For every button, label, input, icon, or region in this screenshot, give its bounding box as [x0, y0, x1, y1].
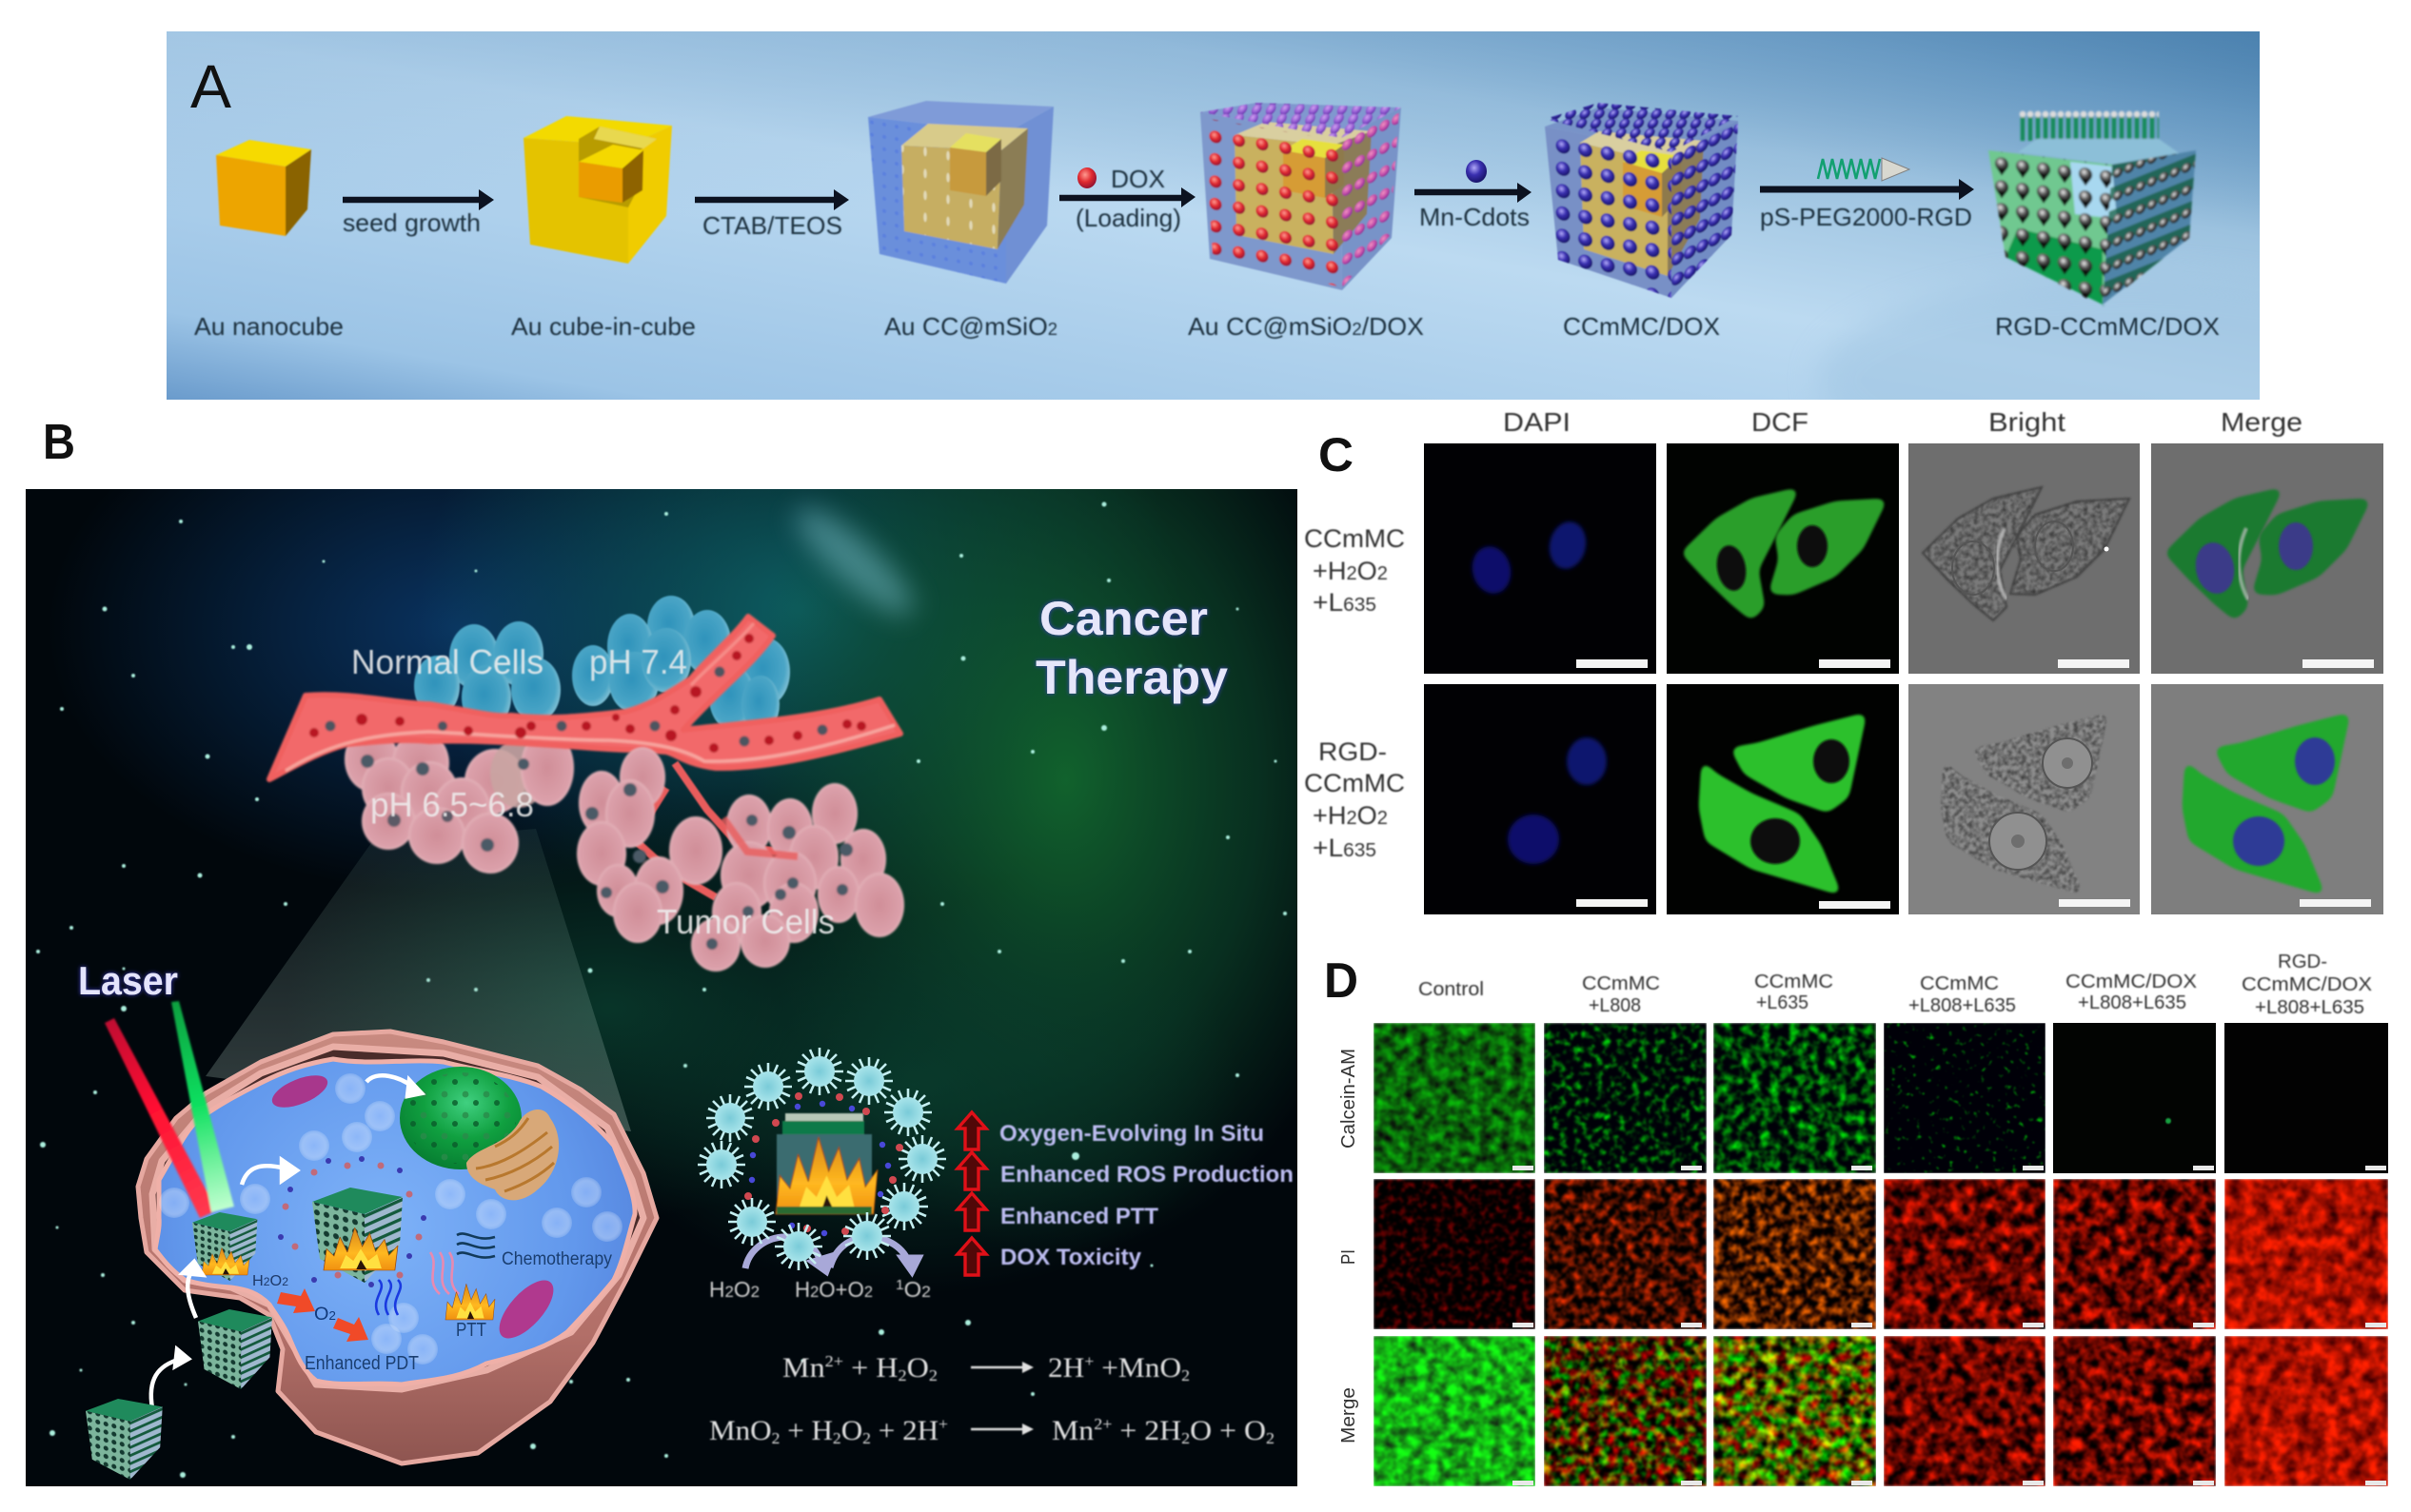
column headers: DAPI [1503, 407, 1571, 437]
equation 1: Mn [782, 1352, 822, 1384]
column headers: Merge [2221, 407, 2302, 437]
image grid: Calcein-AM row [1373, 1023, 2388, 1173]
arrow: seed growth [343, 189, 494, 210]
label: Mn-Cdots: Mn-Cdots [1419, 203, 1530, 231]
equation 2: MnO [709, 1415, 769, 1446]
column header: CCmMC/DOX +L808+L635: +L808+L635 [2078, 992, 2186, 1013]
label: DOX with red ball: DOX [1111, 165, 1165, 193]
list: therapeutic enhancements [958, 1112, 1294, 1275]
equation 1: 2 [929, 1366, 938, 1384]
label: H2O2: H2O2 [709, 1277, 760, 1302]
image: DAPI row 2 [1424, 684, 1656, 914]
equation 2: Mn [1052, 1415, 1092, 1446]
image: Bright row 1 [1908, 443, 2140, 674]
row label 2: +L635 [1313, 834, 1376, 862]
panel A: synthesis scheme [167, 31, 2260, 400]
label: Mn-Cdots drop icon [1466, 160, 1487, 183]
label: Au CC@mSiO2: Au CC@mSiO2 [884, 312, 1057, 341]
golgi [466, 1109, 559, 1200]
normal cells cluster [414, 596, 790, 733]
title: Cancer Therapy [1036, 592, 1228, 704]
label: 1O2: 2 [921, 1283, 931, 1301]
label: pS-PEG2000-RGD: pS-PEG2000-RGD [1760, 203, 1972, 231]
equation 1: + [1084, 1352, 1094, 1370]
title: Cancer Therapy: Cancer [1039, 592, 1208, 645]
central nanoparticle with flame and dots [278, 1156, 426, 1287]
icon: Au CC@mSiO2/DOX [1200, 103, 1401, 290]
reactive oxygen stars [698, 1048, 946, 1230]
nanoparticle with ROS schematic [698, 1048, 946, 1302]
flame: PTT [445, 1284, 495, 1320]
cell body [138, 1031, 657, 1463]
label: H2O2: H2O2 [252, 1273, 288, 1289]
equation 2: 2 [862, 1429, 871, 1447]
column header: RGD-CCmMC/DOX +L808+L635: CCmMC/DOX [2242, 974, 2372, 995]
column header: CCmMC +L808: +L808 [1589, 995, 1641, 1016]
panel B: cancer therapy illustration [26, 489, 1297, 1486]
label: Chemotherapy: Chemotherapy [502, 1249, 612, 1269]
mitochondrion top [267, 1069, 332, 1114]
panel letter A: A [190, 52, 231, 121]
blood vessel [269, 617, 900, 779]
equation 2: 2 [772, 1429, 780, 1447]
label: Tumor Cells: Tumor Cells [657, 902, 835, 941]
row label 1: +H2O2 [1313, 557, 1388, 585]
arrow: Mn-Cdots [1414, 183, 1532, 203]
arrow: pS-PEG2000-RGD [1760, 179, 1974, 200]
column header: CCmMC +L808+L635 [1908, 973, 2016, 1016]
mitochondrion lower [490, 1271, 563, 1347]
label: Laser: Laser [78, 958, 178, 1003]
panel letter D: D [1324, 953, 1358, 1009]
notch nanoparticle [198, 1309, 272, 1389]
equation 2 [709, 1415, 1275, 1447]
row label 1: +L635 [1313, 588, 1376, 617]
label: CCmMC/DOX: CCmMC/DOX [1563, 312, 1720, 341]
column header: CCmMC +L635: +L635 [1756, 992, 1808, 1013]
equation 1: 2 [1181, 1366, 1190, 1384]
O2 bubbles [159, 1073, 623, 1365]
nucleus [400, 1067, 522, 1169]
arrow: DOX loading [1059, 187, 1196, 207]
cytoplasm [155, 1059, 635, 1384]
light cone from tumour to cell [206, 829, 631, 1131]
equation 2: 2 [833, 1429, 841, 1447]
equation 2: 2+ [1094, 1415, 1112, 1433]
column header: CCmMC +L635: CCmMC [1754, 972, 1833, 992]
icon: PEG-RGD spring and cone [1818, 158, 1909, 181]
panel letter B: B [43, 415, 75, 470]
text: Enhanced PTT: Enhanced PTT [1000, 1204, 1158, 1229]
foreground reactive oxygen stars [728, 1198, 891, 1270]
equation 1: + H [843, 1352, 899, 1384]
column header: CCmMC/DOX +L808+L635: CCmMC/DOX [2065, 972, 2197, 992]
equation 2: 2 [1181, 1429, 1190, 1447]
label: Enhanced PDT: Enhanced PDT [305, 1353, 419, 1374]
icon: Au CC@mSiO2 [868, 101, 1054, 284]
label: CTAB/TEOS: CTAB/TEOS [702, 211, 842, 240]
equation 1: +MnO [1094, 1352, 1181, 1384]
text: Enhanced ROS Production: Enhanced ROS Production [1000, 1162, 1294, 1188]
left nanoparticle at laser focus [192, 1212, 257, 1281]
column header: RGD-CCmMC/DOX +L808+L635 [2242, 952, 2372, 1018]
label: Normal Cells: Normal Cells [351, 642, 543, 681]
panel D: live/dead staining grid [1324, 952, 2388, 1486]
white curved arrows [151, 1075, 422, 1408]
row label 1: CCmMC [1304, 524, 1405, 553]
equation 2: + [939, 1415, 948, 1433]
panel C: confocal ROS imaging [1304, 407, 2383, 914]
icon: CCmMC/DOX [1545, 103, 1738, 298]
image: Merge row 1 [2151, 443, 2383, 674]
cell illustration [78, 958, 657, 1480]
equation 2: 2 [1266, 1429, 1275, 1447]
row label 2: CCmMC [1304, 769, 1405, 797]
row label 2: RGD- [1318, 737, 1387, 766]
title: Cancer Therapy: Therapy [1036, 651, 1228, 704]
starfield [36, 502, 1287, 1478]
equation 2: O + O [1190, 1415, 1266, 1446]
row label: PI: PI [1338, 1249, 1359, 1265]
panel B background [26, 489, 1297, 1486]
lower reaction arcs [745, 1237, 919, 1271]
scale bars [1512, 1166, 2386, 1485]
label: (Loading): (Loading) [1076, 204, 1181, 232]
image: Bright row 2 [1908, 684, 2140, 914]
equation 1: 2 [899, 1366, 907, 1384]
row label: Merge: Merge [1338, 1387, 1359, 1443]
label: Au CC@mSiO2/DOX: Au CC@mSiO2/DOX [1188, 312, 1424, 341]
label: Au nanocube: Au nanocube [194, 312, 344, 341]
text: DOX Toxicity: DOX Toxicity [1000, 1245, 1142, 1270]
column header: RGD-CCmMC/DOX +L808+L635: RGD- [2278, 952, 2327, 972]
image: DCF row 2 [1667, 684, 1899, 914]
panel A background [167, 31, 2260, 400]
tumour cells cluster lower [577, 747, 904, 972]
icon: red up arrows [958, 1112, 986, 1275]
laser beams [105, 1001, 234, 1218]
image: DAPI row 1 [1424, 443, 1656, 674]
label: DOX with red ball [1077, 165, 1165, 193]
text: Oxygen-Evolving In Situ: Oxygen-Evolving In Situ [999, 1121, 1264, 1147]
label: pH 6.5~6.8: pH 6.5~6.8 [370, 785, 534, 824]
label: 1O2: 1 [896, 1277, 904, 1293]
column headers: Bright [1988, 407, 2065, 437]
column header: CCmMC +L808+L635: CCmMC [1920, 973, 1999, 994]
label: Au cube-in-cube: Au cube-in-cube [511, 312, 696, 341]
icon: Au nanocube [216, 140, 311, 236]
image: DCF row 1 [1667, 443, 1899, 674]
label: RGD-CCmMC/DOX: RGD-CCmMC/DOX [1995, 312, 2220, 341]
icon: RGD-CCmMC/DOX [1988, 108, 2196, 306]
tumour cells cluster upper [345, 727, 574, 874]
equation 1 [782, 1352, 1190, 1384]
label: pH 7.4: pH 7.4 [589, 642, 687, 681]
equation 2: + H [780, 1415, 833, 1446]
equation 2: O [841, 1415, 862, 1446]
blood vessel branches [634, 763, 855, 897]
equation 2: + 2H [871, 1415, 939, 1446]
row label 1 [1304, 524, 1405, 617]
image grid: Merge row [1373, 1336, 2388, 1486]
equation 1: 2+ [825, 1352, 843, 1370]
row label 2 [1304, 737, 1405, 862]
dots ring [744, 1092, 903, 1236]
equation 1: 2H [1048, 1352, 1083, 1384]
label: O2: O2 [314, 1305, 336, 1325]
icon: Au cube-in-cube [524, 116, 672, 264]
row label 2: +H2O2 [1313, 801, 1388, 830]
column header: RGD-CCmMC/DOX +L808+L635: +L808+L635 [2255, 997, 2364, 1018]
equation 1: O [907, 1352, 929, 1384]
wavy lines [376, 1233, 495, 1315]
outside nanoparticle [86, 1399, 163, 1480]
equation 2: + 2H [1112, 1415, 1181, 1446]
label: seed growth: seed growth [343, 208, 481, 237]
image grid: PI row [1373, 1179, 2388, 1329]
arrow: CTAB/TEOS [695, 189, 849, 210]
column headers [1503, 407, 2302, 437]
column header: CCmMC +L635 [1754, 972, 1833, 1013]
label: PTT: PTT [456, 1320, 486, 1341]
row label: Calcein-AM: Calcein-AM [1338, 1049, 1359, 1149]
column header: CCmMC +L808: CCmMC [1582, 973, 1660, 994]
nanoparticle and flames [776, 1113, 878, 1214]
panel letter C: C [1318, 428, 1354, 481]
column header: CCmMC +L808+L635: +L808+L635 [1908, 995, 2016, 1016]
column headers: DCF [1751, 407, 1808, 437]
column header: CCmMC +L808 [1582, 973, 1660, 1016]
red reaction arrows [277, 1288, 368, 1342]
label: 1O2: O [904, 1277, 921, 1302]
image: Merge row 2 [2151, 684, 2383, 914]
column header: CCmMC/DOX +L808+L635 [2065, 972, 2197, 1013]
inner wall [152, 1047, 643, 1389]
column header: Control: Control [1418, 979, 1484, 1000]
label: H2O+O2: H2O+O2 [795, 1277, 873, 1302]
